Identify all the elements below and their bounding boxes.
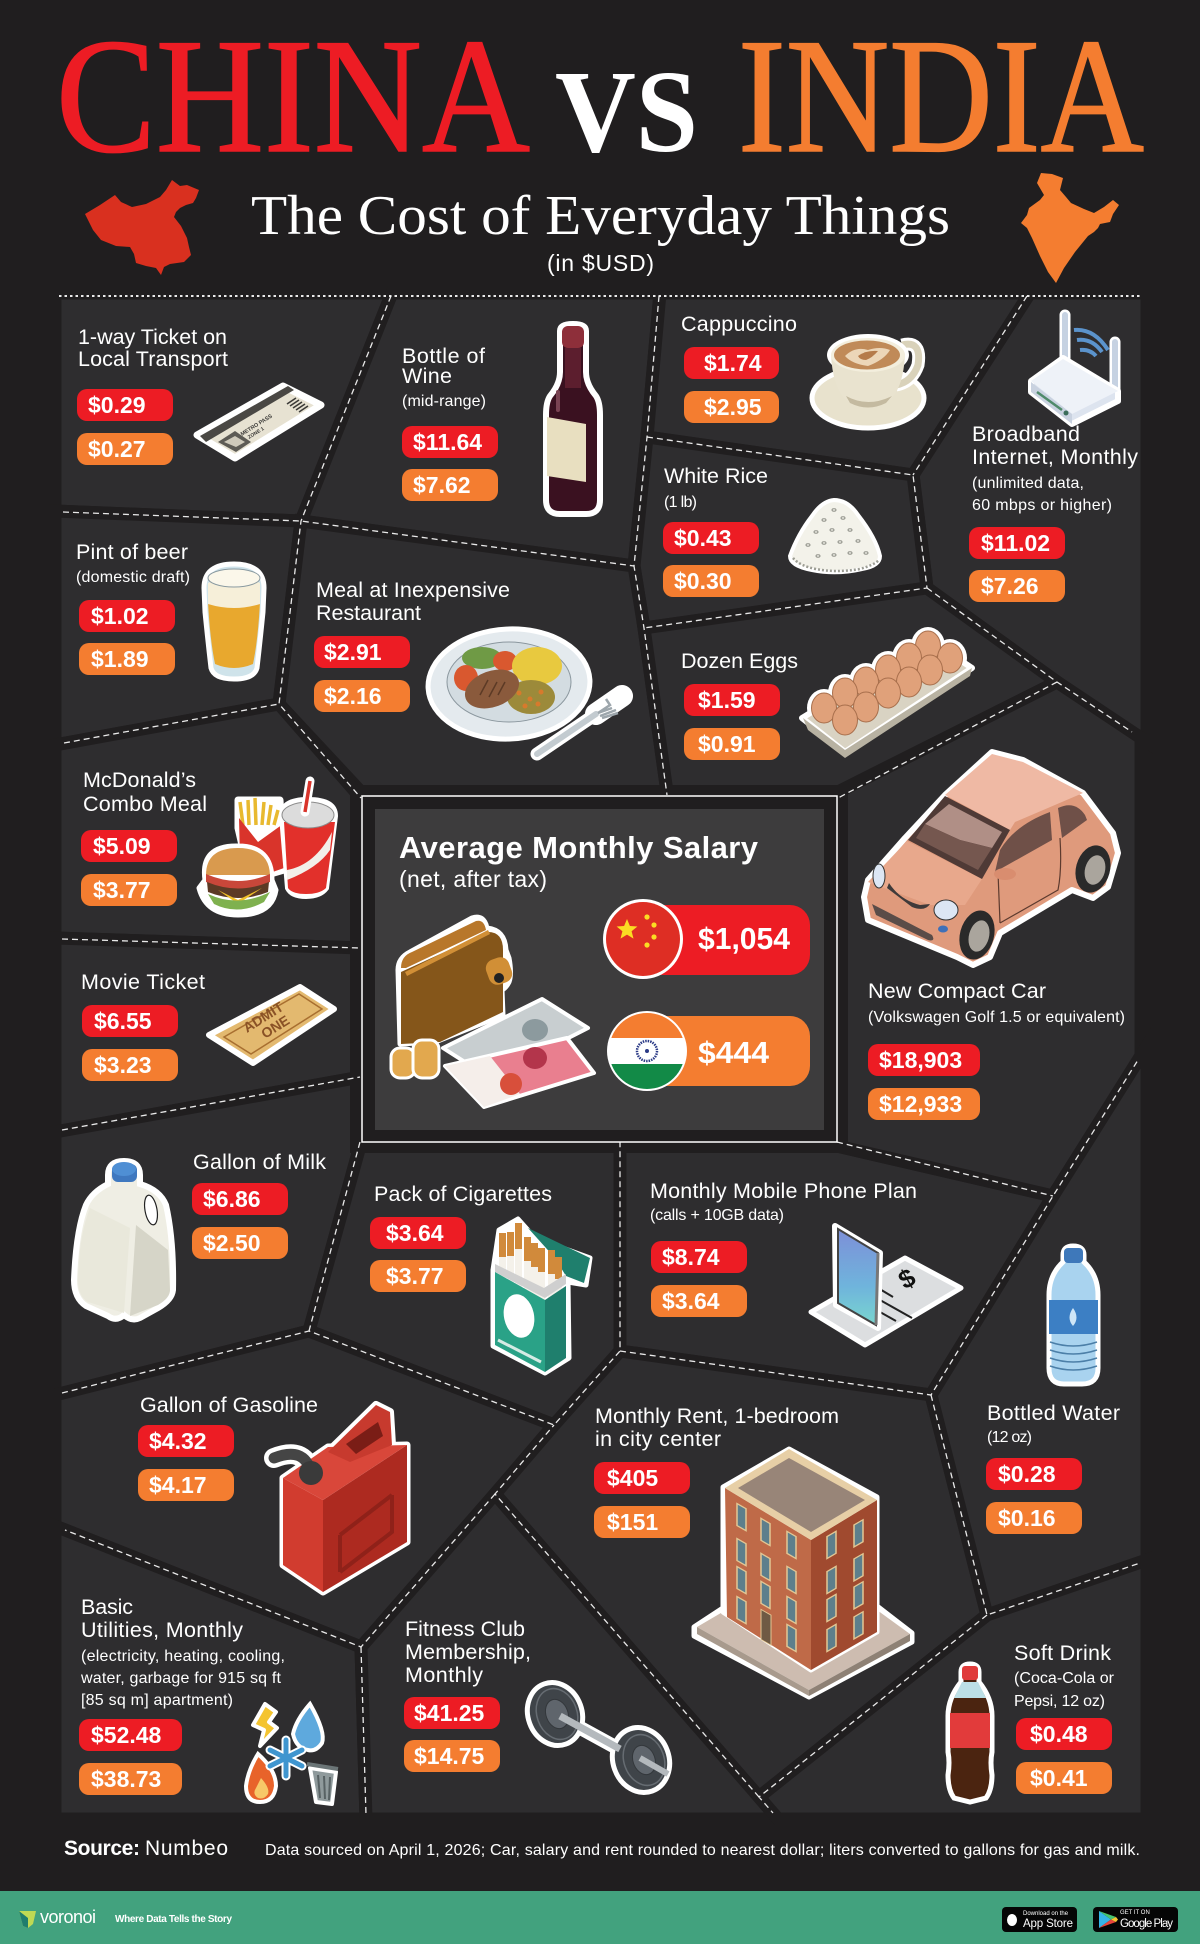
price: India utilities: $38.73 (91, 1766, 161, 1792)
title: INDIA (738, 6, 1144, 187)
price: China meal: $2.91 (324, 639, 382, 665)
icon: admit one ticket (209, 987, 334, 1063)
panel: movie ticket (55, 938, 361, 1132)
source line: Numbeo (145, 1837, 228, 1860)
icon: wallet, banknotes and coins (391, 917, 594, 1107)
heading: meal (316, 578, 510, 625)
subtitle: The Cost of Everyday Things (251, 185, 950, 247)
heading: ticket: 1-way Ticket on (78, 325, 227, 349)
price: India milk (192, 1227, 288, 1259)
icon: metro ticket: METRO PASS (240, 413, 274, 438)
price: China milk: $6.86 (203, 1186, 261, 1212)
badge: App Store (1002, 1907, 1077, 1932)
icon: plate of food (425, 625, 622, 754)
heading: eggs: Dozen Eggs (681, 649, 798, 673)
heading: movie ticket: Movie Ticket (81, 970, 205, 994)
center panel frame (350, 785, 848, 1153)
panel: mobile phone plan (620, 1146, 1053, 1395)
price: China broadband: $11.02 (981, 530, 1050, 556)
heading: car: New Compact Car (868, 979, 1046, 1003)
price: India water: $0.16 (998, 1505, 1056, 1531)
unit note: (in $USD) (547, 250, 654, 276)
heading: rent (595, 1404, 839, 1451)
heading: utilities (80, 1595, 285, 1709)
price: China eggs: $1.59 (698, 687, 756, 713)
heading: beer: (domestic draft) (76, 569, 190, 586)
price: India gasoline (138, 1469, 234, 1501)
heading: soft drink: Pepsi, 12 oz) (1014, 1693, 1105, 1710)
price: India soft drink (1016, 1762, 1112, 1794)
price: India eggs: $0.91 (698, 731, 756, 757)
heading: meal: Meal at Inexpensive (316, 578, 510, 602)
heading: McDonald's: Combo Meal (83, 792, 207, 816)
salary: China: $1,054 (698, 921, 791, 956)
price: China utilities: $52.48 (91, 1722, 162, 1748)
price: China soft drink: $0.48 (1030, 1721, 1088, 1747)
dashed route lines (59, 296, 1141, 1815)
icon: burger, fries and drink (199, 781, 335, 915)
panel: monthly rent (495, 1351, 987, 1797)
price: India beer: $1.89 (91, 646, 149, 672)
price: China water: $0.28 (998, 1461, 1056, 1487)
price: China car (868, 1044, 980, 1076)
price: India cappuccino: $2.95 (704, 394, 762, 420)
heading: rent: Monthly Rent, 1-bedroom (595, 1404, 839, 1428)
price: China gasoline (138, 1425, 234, 1457)
icon: cigarette pack (493, 1219, 590, 1373)
price: China fitness (404, 1697, 500, 1729)
price: India cappuccino (684, 391, 779, 423)
heading: ticket (78, 325, 228, 371)
heading: broadband: 60 mbps or higher) (972, 497, 1112, 514)
price: India water (986, 1502, 1082, 1534)
panel: 1-way ticket (55, 293, 392, 521)
icon: milk jug (74, 1161, 173, 1319)
salary: India: $444 (698, 1035, 770, 1070)
price: India movie: $3.23 (94, 1052, 152, 1078)
icon: egg carton (802, 627, 972, 758)
footnote: Data sourced on April 1, 2026; Car, salary and rent rounded to nearest dollar; liters converted to gallons for gas and milk. (265, 1842, 1140, 1859)
price: India fitness: $14.75 (414, 1743, 485, 1769)
price: China rice (663, 522, 759, 554)
price: China rent: $405 (607, 1465, 658, 1491)
heading: bottled water: Bottled Water (987, 1401, 1120, 1425)
price: India cigarettes (370, 1260, 466, 1292)
panel: gallon of gasoline (55, 1331, 554, 1647)
price: India gasoline: $4.17 (149, 1472, 207, 1498)
heading: wine: (mid-range) (402, 393, 486, 410)
price: India fitness (404, 1740, 500, 1772)
heading: rice: White Rice (664, 464, 768, 488)
icon: metro ticket: ZONE 1 (247, 426, 266, 441)
icon: wine bottle (546, 324, 600, 514)
heading: soft drink: Soft Drink (1014, 1641, 1111, 1665)
panel: pint of beer (55, 511, 301, 745)
panel: white rice (634, 437, 927, 628)
footer band (0, 1891, 1200, 1944)
heading: phone plan (650, 1179, 917, 1224)
price: India McDonald's: $3.77 (93, 877, 151, 903)
price: China meal (314, 636, 410, 668)
heading: broadband: Internet, Monthly (972, 445, 1138, 469)
price: India ticket: $0.27 (88, 436, 146, 462)
panel: cappuccino (647, 293, 1030, 475)
icon: cola bottle (948, 1664, 992, 1802)
heading: meal: Restaurant (316, 601, 421, 625)
heading: wine (402, 344, 486, 410)
heading: salary: Average Monthly Salary (399, 830, 759, 865)
badge: Google Play (1093, 1907, 1178, 1932)
heading: beer (76, 540, 190, 586)
heading: McDonald's (83, 768, 207, 816)
price: India utilities (79, 1763, 182, 1795)
price: India phone: $3.64 (662, 1288, 720, 1314)
price: China McDonald's: $5.09 (93, 833, 151, 859)
price: China fitness: $41.25 (414, 1700, 485, 1726)
price: China ticket: $0.29 (88, 392, 146, 418)
price: China movie (82, 1005, 178, 1037)
price: China ticket (77, 389, 173, 421)
price: China milk (192, 1183, 288, 1215)
source line: Source: (64, 1837, 140, 1860)
heading: soft drink: (Coca-Cola or (1014, 1670, 1115, 1687)
icon: water bottle (1049, 1246, 1098, 1384)
icon: wifi router (1031, 315, 1118, 424)
panel: bottled water (931, 1046, 1147, 1615)
heading: broadband (972, 422, 1138, 514)
salary: India (605, 1010, 810, 1094)
icon: admit one ticket: ONE (258, 1012, 292, 1042)
price: China car: $18,903 (879, 1047, 962, 1073)
icon: phone and bill (811, 1226, 961, 1345)
price: India wine: $7.62 (413, 472, 471, 498)
price: India movie (82, 1049, 178, 1081)
heading: fitness: Fitness Club (405, 1617, 525, 1641)
heading: ticket: Local Transport (78, 347, 228, 371)
heading: salary: (net, after tax) (399, 866, 547, 892)
price: India beer (79, 643, 175, 675)
icon: China map (85, 180, 199, 275)
price: China cappuccino (684, 347, 779, 379)
panel: bottle of wine (301, 293, 660, 566)
price: China cigarettes (370, 1217, 466, 1249)
heading: car: (Volkswagen Golf 1.5 or equivalent) (868, 1009, 1125, 1026)
icon: utility symbols (246, 1704, 338, 1804)
heading: phone plan: Monthly Mobile Phone Plan (650, 1179, 917, 1203)
price: India ticket (77, 433, 173, 465)
price: India eggs (684, 728, 780, 760)
price: China wine (402, 426, 498, 458)
heading: broadband: (unlimited data, (972, 475, 1084, 492)
title (56, 6, 1144, 187)
heading: rice: (1 lb) (664, 494, 697, 511)
icon: admit one ticket: ADMIT (240, 998, 287, 1036)
icon: voronoi logo (19, 1911, 36, 1928)
price: China McDonald's (81, 830, 177, 862)
icon: coffee cup (812, 334, 924, 428)
heading: bottled water (987, 1401, 1120, 1446)
price: India rice: $0.30 (674, 568, 732, 594)
price: India meal (314, 680, 410, 712)
heading: fitness: Monthly (405, 1663, 483, 1687)
price: India wine (402, 469, 498, 501)
heading: utilities: Basic (81, 1595, 133, 1619)
brand name: voronoi (40, 1907, 96, 1927)
panel: dozen eggs (644, 588, 1057, 792)
heading: fitness (405, 1617, 531, 1687)
heading: McDonald's: McDonald’s (83, 768, 196, 792)
tagline: Where Data Tells the Story (115, 1914, 232, 1925)
heading: wine: Wine (402, 364, 452, 388)
icon: compact car (864, 752, 1118, 965)
heading: bottled water: (12 oz) (987, 1429, 1032, 1446)
heading: utilities: [85 sq m] apartment) (81, 1692, 233, 1709)
price: China rice: $0.43 (674, 525, 732, 551)
heading: rice (664, 464, 768, 511)
price: India car (868, 1088, 980, 1120)
price: India phone (651, 1285, 747, 1317)
icon: dumbbell (519, 1675, 679, 1801)
icon: metro ticket (197, 386, 321, 458)
price: India broadband: $7.26 (981, 573, 1039, 599)
price: India McDonald's (81, 874, 177, 906)
heading: utilities: (electricity, heating, cooling, (81, 1648, 285, 1665)
source line (64, 1837, 228, 1860)
icon: apartment building (694, 1449, 912, 1697)
price: China utilities (79, 1719, 182, 1751)
heading: wine: Bottle of (402, 344, 485, 368)
price: China broadband (969, 527, 1065, 559)
price: India car: $12,933 (879, 1091, 962, 1117)
price: China phone: $8.74 (662, 1244, 720, 1270)
icon: beer glass (204, 564, 264, 679)
heading: utilities: Utilities, Monthly (81, 1618, 243, 1642)
heading: beer: Pint of beer (76, 540, 188, 564)
panel: new compact car (837, 682, 1141, 1196)
price: India milk: $2.50 (203, 1230, 261, 1256)
heading: salary (399, 830, 759, 892)
heading: rent: in city center (595, 1427, 721, 1451)
heading: soft drink (1014, 1641, 1115, 1710)
price: China cigarettes: $3.64 (386, 1220, 444, 1246)
heading: phone plan: (calls + 10GB data) (650, 1207, 784, 1224)
badge: Google Play: GET IT ON (1120, 1910, 1150, 1916)
price: China eggs (684, 684, 780, 716)
heading: milk: Gallon of Milk (193, 1150, 326, 1174)
title: CHINA (56, 6, 530, 187)
panel: average monthly salary (362, 796, 837, 1142)
icon: India map (1021, 173, 1119, 283)
price: China beer: $1.02 (91, 603, 149, 629)
title: VS (555, 46, 698, 177)
panel: soft drink (759, 1560, 1147, 1819)
panel: meal at restaurant (279, 521, 667, 792)
panel: gallon of milk (55, 1077, 361, 1395)
badge: Google Play: Google Play (1120, 1918, 1173, 1930)
heading: cigarettes: Pack of Cigarettes (374, 1182, 552, 1206)
price: India rice (663, 565, 759, 597)
price: India rent (594, 1506, 690, 1538)
panel: fitness club (361, 1494, 778, 1819)
price: India broadband (969, 570, 1065, 602)
heading: cappuccino: Cappuccino (681, 312, 797, 336)
icon: rice mound (790, 500, 880, 572)
icon: jerry can (274, 1405, 407, 1592)
badge: App Store: App Store (1023, 1918, 1073, 1930)
price: China beer (79, 600, 175, 632)
price: China gasoline: $4.32 (149, 1428, 207, 1454)
panel: pack of cigarettes (309, 1146, 620, 1425)
price: China wine: $11.64 (413, 429, 482, 455)
heading: fitness: Membership, (405, 1640, 531, 1664)
heading: car (868, 979, 1125, 1026)
price: China rent (594, 1462, 690, 1494)
panel: McDonald's combo (55, 704, 361, 948)
price: India rent: $151 (607, 1509, 658, 1535)
price: China phone (651, 1241, 747, 1273)
salary: China (603, 899, 810, 979)
badge: App Store: Download on the (1023, 1911, 1069, 1917)
price: India meal: $2.16 (324, 683, 382, 709)
heading: utilities: water, garbage for 915 sq ft (80, 1670, 282, 1687)
price: India soft drink: $0.41 (1030, 1765, 1088, 1791)
heading: broadband: Broadband (972, 422, 1080, 446)
panel: basic utilities (55, 1526, 366, 1819)
price: China water (986, 1458, 1082, 1490)
price: China soft drink (1016, 1718, 1112, 1750)
price: India cigarettes: $3.77 (386, 1263, 444, 1289)
heading: gasoline: Gallon of Gasoline (140, 1393, 318, 1417)
price: China cappuccino: $1.74 (704, 350, 762, 376)
icon: phone and bill: $ (893, 1262, 921, 1295)
panel: broadband internet (913, 293, 1147, 742)
price: China movie: $6.55 (94, 1008, 152, 1034)
